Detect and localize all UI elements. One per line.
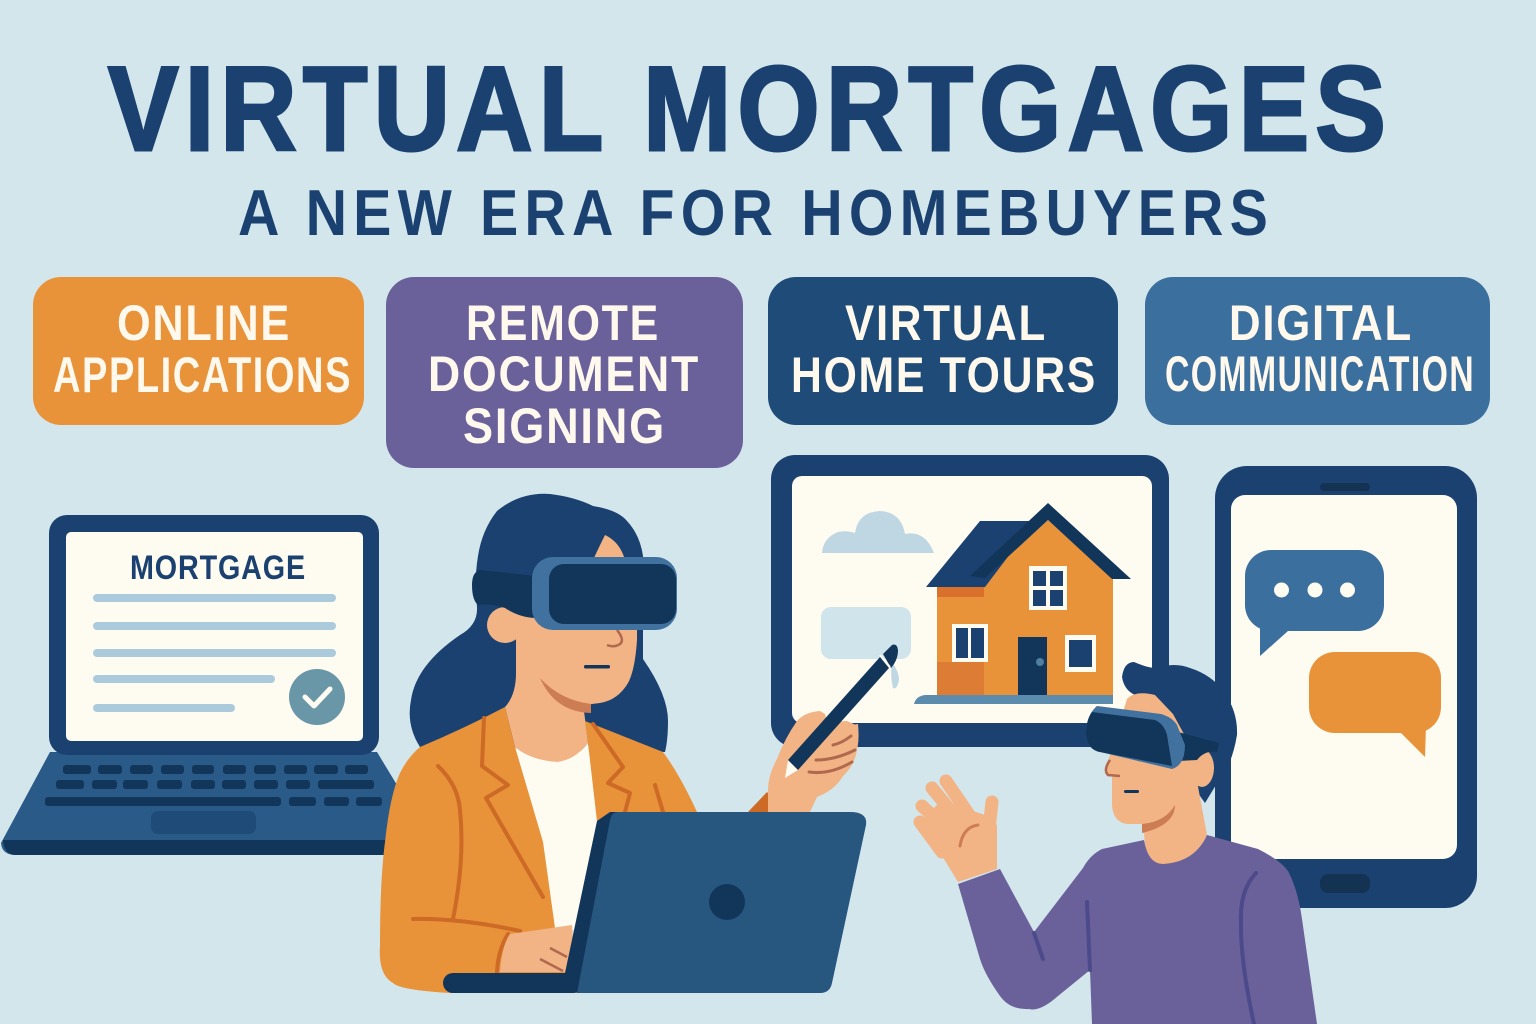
forehead [593, 535, 625, 560]
icon: tablet with house [771, 455, 1169, 747]
typing hand [500, 925, 575, 972]
nose and mouth [1106, 760, 1120, 776]
neck and face [1105, 693, 1207, 864]
icon: house [914, 503, 1131, 704]
jacket [380, 707, 590, 993]
headset [532, 557, 677, 630]
title: VIRTUAL MORTGAGES [108, 42, 1392, 176]
icon: orange chat bubble [1309, 652, 1441, 757]
gripping fingers [810, 724, 859, 778]
icon: mortgage laptop: MORTGAGE [130, 549, 306, 587]
hair [410, 494, 668, 752]
sweater folds [1034, 873, 1256, 1024]
panel: virtual home tours: HOME TOURS [791, 347, 1097, 403]
panel: virtual home tours [768, 277, 1118, 425]
icon: mortgage laptop [1, 515, 400, 855]
headset [1086, 706, 1185, 769]
shirt [515, 743, 600, 930]
panel: remote document signing: SIGNING [463, 398, 666, 454]
figure: woman with VR headset [380, 494, 898, 993]
panel: virtual home tours: VIRTUAL [845, 295, 1047, 351]
jacket seams [413, 718, 663, 972]
icon: blue chat bubble [1245, 550, 1384, 656]
panel: online applications: APPLICATIONS [53, 347, 352, 403]
figure: man with VR headset [920, 662, 1317, 1024]
icon: smartphone with chat [1215, 466, 1477, 908]
pointing hand [768, 711, 858, 812]
icon: pale message card [821, 607, 911, 659]
neck and face [505, 610, 637, 762]
raised hand [920, 781, 997, 882]
icon: cloud [822, 511, 934, 553]
headset strap [1178, 732, 1219, 761]
panel: online applications: ONLINE [117, 295, 291, 351]
nose and mouth [607, 630, 622, 646]
panel: remote document signing: REMOTE [466, 295, 660, 351]
panel: digital communication: DIGITAL [1229, 295, 1413, 351]
sleeve cuff [748, 792, 785, 812]
panel: remote document signing: DOCUMENT [428, 346, 700, 402]
sweater [958, 835, 1317, 1024]
panel: online applications [33, 277, 364, 425]
icon: ink drop [891, 662, 899, 688]
hair [1122, 662, 1237, 803]
icon: foreground laptop [443, 812, 866, 993]
panel: remote document signing [386, 277, 743, 468]
subtitle: A NEW ERA FOR HOMEBUYERS [238, 176, 1274, 249]
panel: digital communication [1145, 277, 1490, 425]
chin shadow [540, 678, 591, 713]
neck shadow [1142, 805, 1175, 833]
ear [487, 607, 523, 643]
headset strap [472, 570, 537, 618]
stylus [785, 645, 898, 778]
ear [1190, 749, 1214, 787]
